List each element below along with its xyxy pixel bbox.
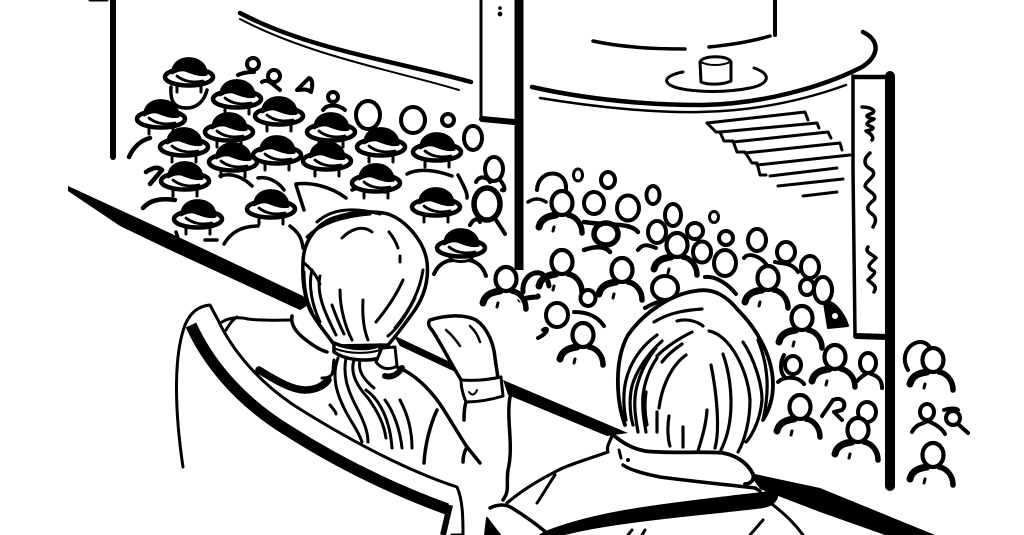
centre pillar bbox=[481, 0, 519, 270]
left pillar bbox=[90, 0, 113, 157]
crowd: bare heads behind the hats bbox=[238, 58, 505, 234]
crowd: rows at centre and right bbox=[483, 169, 968, 485]
seat back in front of woman bbox=[176, 305, 463, 535]
balcony curve bbox=[240, 13, 471, 90]
stage cylinder bbox=[593, 0, 775, 49]
stage disc edge bbox=[532, 32, 876, 112]
man with grey hair bbox=[617, 290, 773, 455]
stage prop on ring bbox=[667, 57, 766, 91]
staircase bbox=[707, 112, 850, 196]
right pillar bbox=[853, 76, 892, 486]
crowd: hatted audience at left bbox=[129, 58, 486, 276]
woman with ponytail bbox=[222, 210, 480, 463]
man's collar and jacket bbox=[485, 435, 803, 535]
woman's raised hand and cuff bbox=[429, 316, 510, 500]
balcony rail bbox=[68, 186, 935, 535]
